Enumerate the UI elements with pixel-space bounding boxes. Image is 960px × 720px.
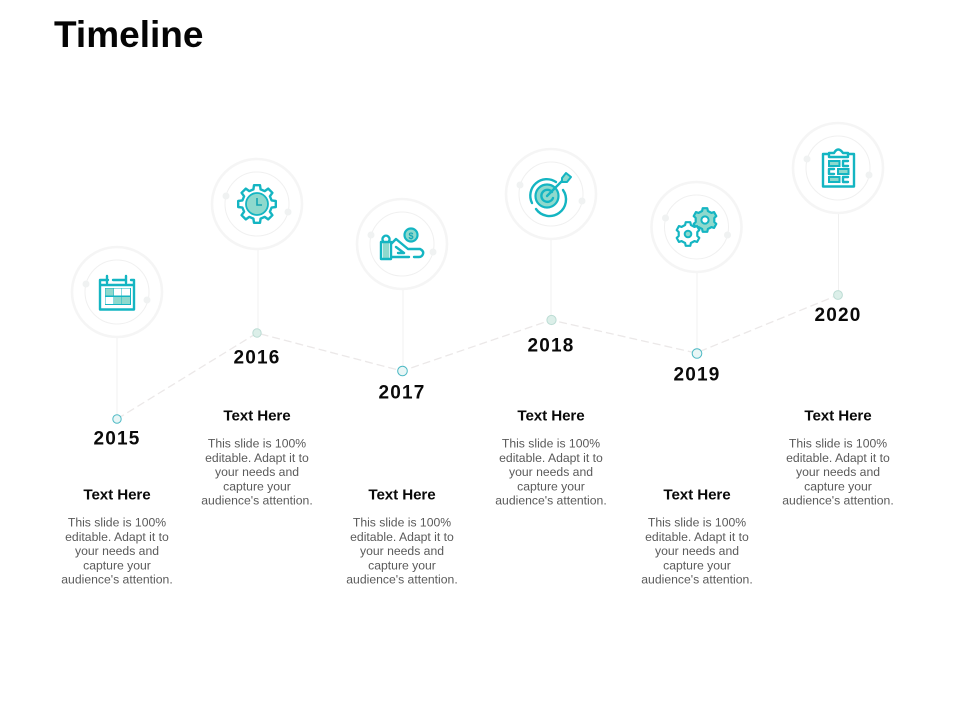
text block 2015: Text Here bbox=[83, 486, 151, 504]
text block 2020: your needs and bbox=[796, 465, 880, 479]
text block 2016: capture your bbox=[223, 480, 291, 494]
marker 2016 bbox=[253, 329, 261, 337]
icon: target with dart bbox=[530, 173, 571, 216]
text block 2019: editable. Adapt it to bbox=[645, 530, 749, 544]
timeline dashed line bbox=[117, 295, 838, 419]
text block 2020 bbox=[782, 408, 894, 508]
milestone 2015 bbox=[61, 247, 173, 586]
icon: gear with clock bbox=[238, 185, 276, 223]
text block 2018: audience's attention. bbox=[495, 494, 607, 508]
milestone 2018 bbox=[495, 149, 607, 508]
text block 2016: editable. Adapt it to bbox=[205, 451, 309, 465]
text block 2019: your needs and bbox=[655, 544, 739, 558]
marker 2015 bbox=[113, 415, 121, 423]
rings 2015 bbox=[72, 247, 162, 337]
rings 2020 bbox=[793, 123, 883, 213]
icon: hand with coin: $ bbox=[408, 231, 414, 241]
text block 2019: audience's attention. bbox=[641, 572, 753, 586]
text block 2020: audience's attention. bbox=[782, 494, 894, 508]
text block 2017: This slide is 100% bbox=[353, 516, 451, 530]
milestone 2016 bbox=[201, 159, 313, 508]
text block 2015: This slide is 100% bbox=[68, 516, 166, 530]
icon: calendar bbox=[100, 276, 134, 310]
text block 2015: your needs and bbox=[75, 544, 159, 558]
text block 2015: capture your bbox=[83, 558, 151, 572]
stem 2019 bbox=[696, 273, 698, 349]
text block 2015: editable. Adapt it to bbox=[65, 530, 169, 544]
text block 2020: capture your bbox=[804, 480, 872, 494]
text block 2016: audience's attention. bbox=[201, 494, 313, 508]
text block 2019: This slide is 100% bbox=[648, 516, 746, 530]
text block 2017: editable. Adapt it to bbox=[350, 530, 454, 544]
text block 2018: This slide is 100% bbox=[502, 436, 600, 450]
text block 2019: Text Here bbox=[663, 486, 731, 504]
text block 2018 bbox=[495, 408, 607, 508]
text block 2018: your needs and bbox=[509, 465, 593, 479]
stem 2015 bbox=[116, 338, 118, 415]
marker 2017 bbox=[398, 366, 407, 376]
text block 2015: audience's attention. bbox=[61, 572, 173, 586]
marker 2019 bbox=[692, 349, 702, 358]
stem 2017 bbox=[402, 290, 404, 367]
stem 2018 bbox=[550, 240, 552, 316]
text block 2015 bbox=[61, 486, 173, 586]
text block 2016: This slide is 100% bbox=[208, 436, 306, 450]
year 2020: 2020 bbox=[814, 305, 862, 326]
text block 2019 bbox=[641, 486, 753, 586]
text block 2018: Text Here bbox=[517, 408, 585, 424]
text block 2017: capture your bbox=[368, 558, 436, 572]
title: Timeline bbox=[54, 14, 203, 55]
rings 2018 bbox=[506, 149, 596, 239]
text block 2017: audience's attention. bbox=[346, 572, 458, 586]
year 2018: 2018 bbox=[527, 336, 575, 356]
text block 2018: editable. Adapt it to bbox=[499, 451, 603, 465]
rings 2016 bbox=[212, 159, 302, 249]
year 2015: 2015 bbox=[93, 428, 141, 450]
year 2016: 2016 bbox=[233, 348, 281, 368]
text block 2019: capture your bbox=[663, 558, 731, 572]
stem 2016 bbox=[257, 250, 259, 329]
year 2017: 2017 bbox=[378, 382, 426, 404]
text block 2016 bbox=[201, 408, 313, 508]
icon: gears bbox=[677, 208, 716, 246]
text block 2017: Text Here bbox=[368, 486, 436, 504]
marker 2018 bbox=[547, 315, 556, 325]
year 2019: 2019 bbox=[673, 364, 721, 386]
stem 2020 bbox=[838, 214, 840, 291]
milestone 2017 bbox=[346, 199, 458, 586]
text block 2018: capture your bbox=[517, 480, 585, 494]
text block 2016: your needs and bbox=[215, 465, 299, 479]
icon: hand with coin bbox=[381, 228, 423, 259]
milestone 2019 bbox=[641, 182, 753, 586]
text block 2017 bbox=[346, 486, 458, 586]
large gear bbox=[694, 208, 716, 232]
milestone 2020 bbox=[782, 123, 894, 508]
marker 2020 bbox=[834, 291, 842, 299]
small gear bbox=[677, 222, 699, 246]
text block 2020: Text Here bbox=[804, 408, 872, 424]
text block 2020: This slide is 100% bbox=[789, 436, 887, 450]
rings 2017 bbox=[357, 199, 447, 289]
text block 2020: editable. Adapt it to bbox=[786, 451, 890, 465]
text block 2017: your needs and bbox=[360, 544, 444, 558]
rings 2019 bbox=[652, 182, 742, 272]
text block 2016: Text Here bbox=[223, 408, 291, 424]
icon: clipboard bbox=[823, 150, 854, 186]
